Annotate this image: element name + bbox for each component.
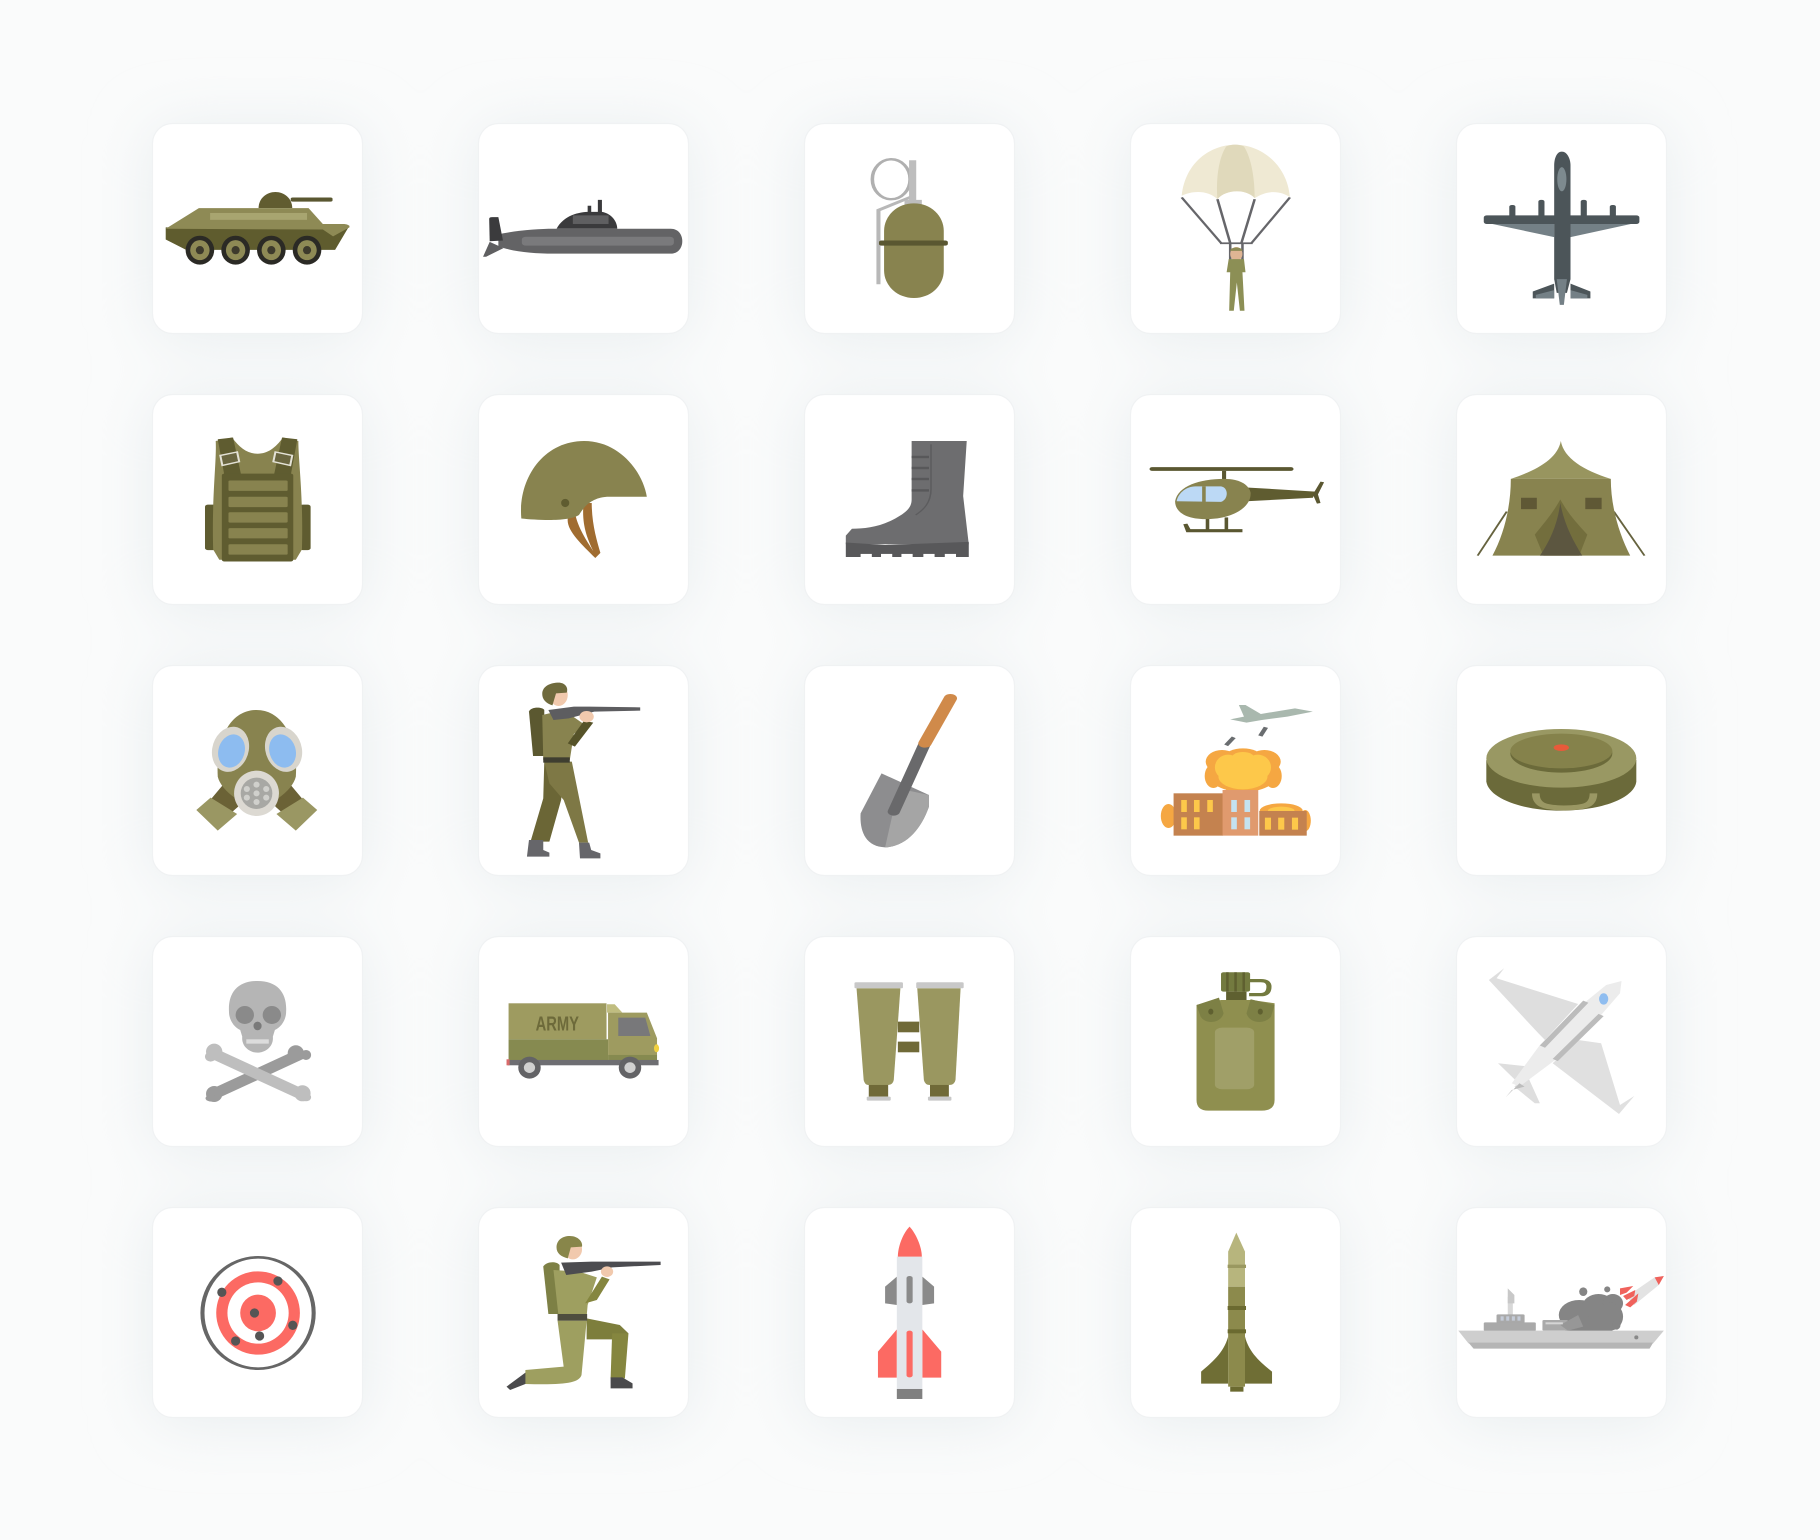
icon: skull and crossbones [205,981,311,1102]
icon: shovel [860,698,950,847]
panel: red rocket card [804,1208,1014,1418]
panel: target card [152,1208,362,1418]
panel: shovel card [804,666,1014,876]
icon: standing soldier [527,683,640,858]
panel: gas mask card [152,666,362,876]
panel: fighter jet card [1456,936,1666,1146]
panel: green missile card [1130,1208,1340,1418]
icon: shooting target [202,1257,314,1369]
panel: parachute card [1130,124,1340,334]
icon: armoured vehicle [166,192,350,265]
panel: standing soldier card [478,666,688,876]
icon: helicopter [1150,467,1324,532]
icon: bombed building [1161,705,1313,836]
icon: red rocket [878,1227,941,1399]
icon: army truck: ARMY [536,1012,579,1035]
icon: warship launching rocket [1458,1276,1664,1349]
panel: army truck card [478,936,688,1146]
panel: land mine card [1456,666,1666,876]
panel: boot card [804,394,1014,604]
icon: canteen [1197,972,1275,1111]
panel: kneeling soldier card [478,1208,688,1418]
panel: helmet card [478,394,688,604]
icon: binoculars [854,982,964,1101]
icon: body armour [205,438,311,561]
icon: bomber plane [1484,152,1639,305]
panel: canteen card [1130,936,1340,1146]
icon: land mine [1486,729,1636,811]
panel: body armour card [152,394,362,604]
panel: bomber plane card [1456,124,1666,334]
icon: tent [1478,441,1644,556]
icon: kneeling soldier [507,1236,661,1390]
icon: helmet [521,441,647,558]
icon: parachutist [1182,145,1290,311]
icon: gas mask [196,710,317,831]
panel: submarine card [478,124,688,334]
icon: submarine [483,200,682,257]
panel: tent card [1456,394,1666,604]
icon: white fighter jet [1489,968,1634,1114]
panel: helicopter card [1130,394,1340,604]
panel: binoculars card [804,936,1014,1146]
icon: army truck [507,1003,659,1079]
panel: grenade card [804,124,1014,334]
panel: armoured vehicle card [152,124,362,334]
icon: green missile [1201,1233,1272,1392]
panel: bombing raid card [1130,666,1340,876]
icon: boot [846,441,969,557]
panel: warship card [1456,1208,1666,1418]
icon: grenade [872,159,948,298]
panel: skull card [152,936,362,1146]
